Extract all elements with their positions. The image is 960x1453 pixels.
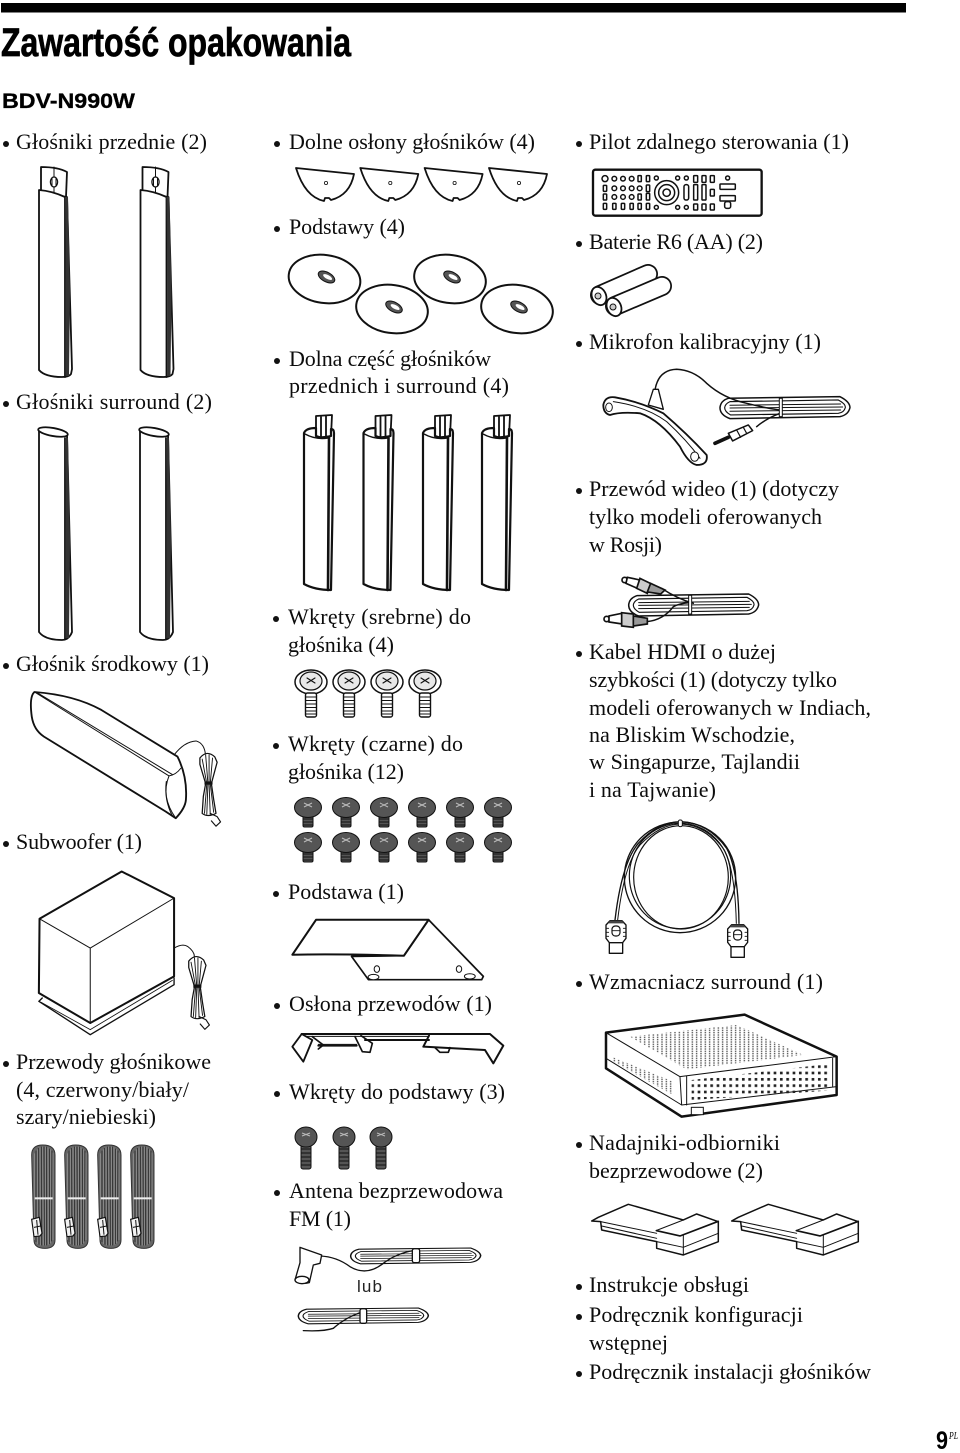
item: HDMI cable: modeli oferowanych w Indiach, xyxy=(589,695,871,720)
item: documents: Instrukcje obsługi xyxy=(589,1272,749,1297)
item: cable cover: Osłona przewodów (1) xyxy=(289,991,492,1016)
icon: black screws xyxy=(294,798,512,862)
item: wireless transceivers xyxy=(576,1130,858,1255)
item: calibration microphone: Mikrofon kalibracyjny (1) xyxy=(589,329,821,354)
item: speaker bottom parts: Dolna część głośników xyxy=(289,346,491,371)
item: bottom covers xyxy=(274,129,547,201)
model heading: BDV-N990W xyxy=(2,90,135,113)
item: HDMI cable: szybkości (1) (dotyczy tylko xyxy=(589,667,837,692)
icon: base discs xyxy=(286,250,556,338)
item: wireless transceivers: bezprzewodowe (2) xyxy=(589,1158,763,1183)
item: speaker bottom parts: przednich i surround (4) xyxy=(289,373,509,398)
item: documents: wstępnej xyxy=(589,1330,668,1355)
item: remote control xyxy=(576,129,849,216)
item: FM antenna: FM (1) xyxy=(289,1206,351,1231)
item: speaker bottom parts xyxy=(274,346,512,590)
item: surround speakers: Głośniki surround (2) xyxy=(16,389,212,414)
item: cable cover xyxy=(274,991,503,1063)
item: HDMI cable: Kabel HDMI o dużej xyxy=(589,639,776,664)
icon: FM antenna variant A xyxy=(295,1247,481,1284)
item: video cable xyxy=(576,476,839,627)
item: bottom covers: Dolne osłony głośników (4) xyxy=(289,129,535,154)
icon: remote control xyxy=(593,170,762,216)
item: HDMI cable xyxy=(576,639,871,957)
item: calibration microphone xyxy=(576,329,850,465)
item: speaker cables: Przewody głośnikowe xyxy=(16,1049,211,1074)
item: documents: Podręcznik konfiguracji xyxy=(589,1302,803,1327)
icon: FM antenna variant B xyxy=(298,1308,428,1331)
icon: calibration microphone xyxy=(603,369,850,465)
item: silver screws xyxy=(273,604,471,717)
item: stands: Podstawy (4) xyxy=(289,214,405,239)
item: FM antenna: Antena bezprzewodowa xyxy=(289,1178,503,1203)
item: FM antenna xyxy=(274,1178,503,1331)
icon: base screws xyxy=(295,1127,392,1169)
icon: wireless transceivers xyxy=(592,1204,858,1255)
icon: batteries xyxy=(589,274,662,319)
item: batteries: Baterie R6 (AA) (2) xyxy=(589,229,763,254)
icon: silver screws xyxy=(295,670,441,717)
item: remote control: Pilot zdalnego sterowania (1) xyxy=(589,129,849,154)
icon: centre speaker xyxy=(31,692,221,826)
icon: speaker cable bundles xyxy=(32,1145,154,1248)
item: subwoofer: Subwoofer (1) xyxy=(16,829,142,854)
item: speaker cables xyxy=(3,1049,211,1248)
icon: surround amplifier xyxy=(606,1015,837,1117)
item: centre speaker: Głośnik środkowy (1) xyxy=(16,651,209,676)
top bar xyxy=(1,3,906,12)
page number xyxy=(936,1427,958,1453)
item: front speakers: Głośniki przednie (2) xyxy=(16,129,207,154)
item: black screws: głośnika (12) xyxy=(288,759,404,784)
icon: HDMI cable xyxy=(606,820,748,957)
item: surround amplifier xyxy=(576,969,837,1117)
icon: bottom covers xyxy=(296,168,547,201)
item: stand plate: Podstawa (1) xyxy=(288,879,404,904)
item: subwoofer xyxy=(3,829,209,1035)
item: silver screws: głośnika (4) xyxy=(288,632,394,657)
icon: cable cover xyxy=(292,1034,503,1063)
item: video cable: w Rosji) xyxy=(589,532,662,557)
item: wireless transceivers: Nadajniki-odbiorniki xyxy=(589,1130,780,1155)
item: silver screws: Wkręty (srebrne) do xyxy=(288,604,471,629)
item: speaker cables: (4, czerwony/biały/ xyxy=(16,1077,190,1102)
item: surround amplifier: Wzmacniacz surround (1) xyxy=(589,969,823,994)
label: or: lub xyxy=(357,1277,382,1296)
item: speaker cables: szary/niebieski) xyxy=(16,1104,156,1129)
icon: stand plate xyxy=(292,920,483,980)
item: stands xyxy=(274,214,556,338)
item: HDMI cable: na Bliskim Wschodzie, xyxy=(589,722,795,747)
item: black screws: Wkręty (czarne) do xyxy=(288,731,463,756)
icon: subwoofer xyxy=(39,871,209,1035)
item: centre speaker xyxy=(3,651,221,826)
item: stand plate xyxy=(273,879,483,980)
item: video cable: tylko modeli oferowanych xyxy=(589,504,822,529)
item: video cable: Przewód wideo (1) (dotyczy xyxy=(589,476,839,501)
item: HDMI cable: i na Tajwanie) xyxy=(589,777,716,802)
icon: front speakers xyxy=(39,167,174,377)
item: base screws xyxy=(274,1079,505,1169)
title: Zawartość opakowania xyxy=(1,21,352,65)
icon: speaker bottom parts xyxy=(304,415,512,590)
item: surround speakers xyxy=(3,389,212,640)
icon: video cable xyxy=(604,577,759,627)
item: documents xyxy=(576,1272,871,1384)
item: black screws xyxy=(273,731,512,862)
item: front speakers xyxy=(3,129,207,377)
item: base screws: Wkręty do podstawy (3) xyxy=(289,1079,505,1104)
item: documents: Podręcznik instalacji głośników xyxy=(589,1359,871,1384)
item: HDMI cable: w Singapurze, Tajlandii xyxy=(589,749,800,774)
item: batteries xyxy=(576,229,763,319)
icon: surround speakers xyxy=(38,425,173,640)
